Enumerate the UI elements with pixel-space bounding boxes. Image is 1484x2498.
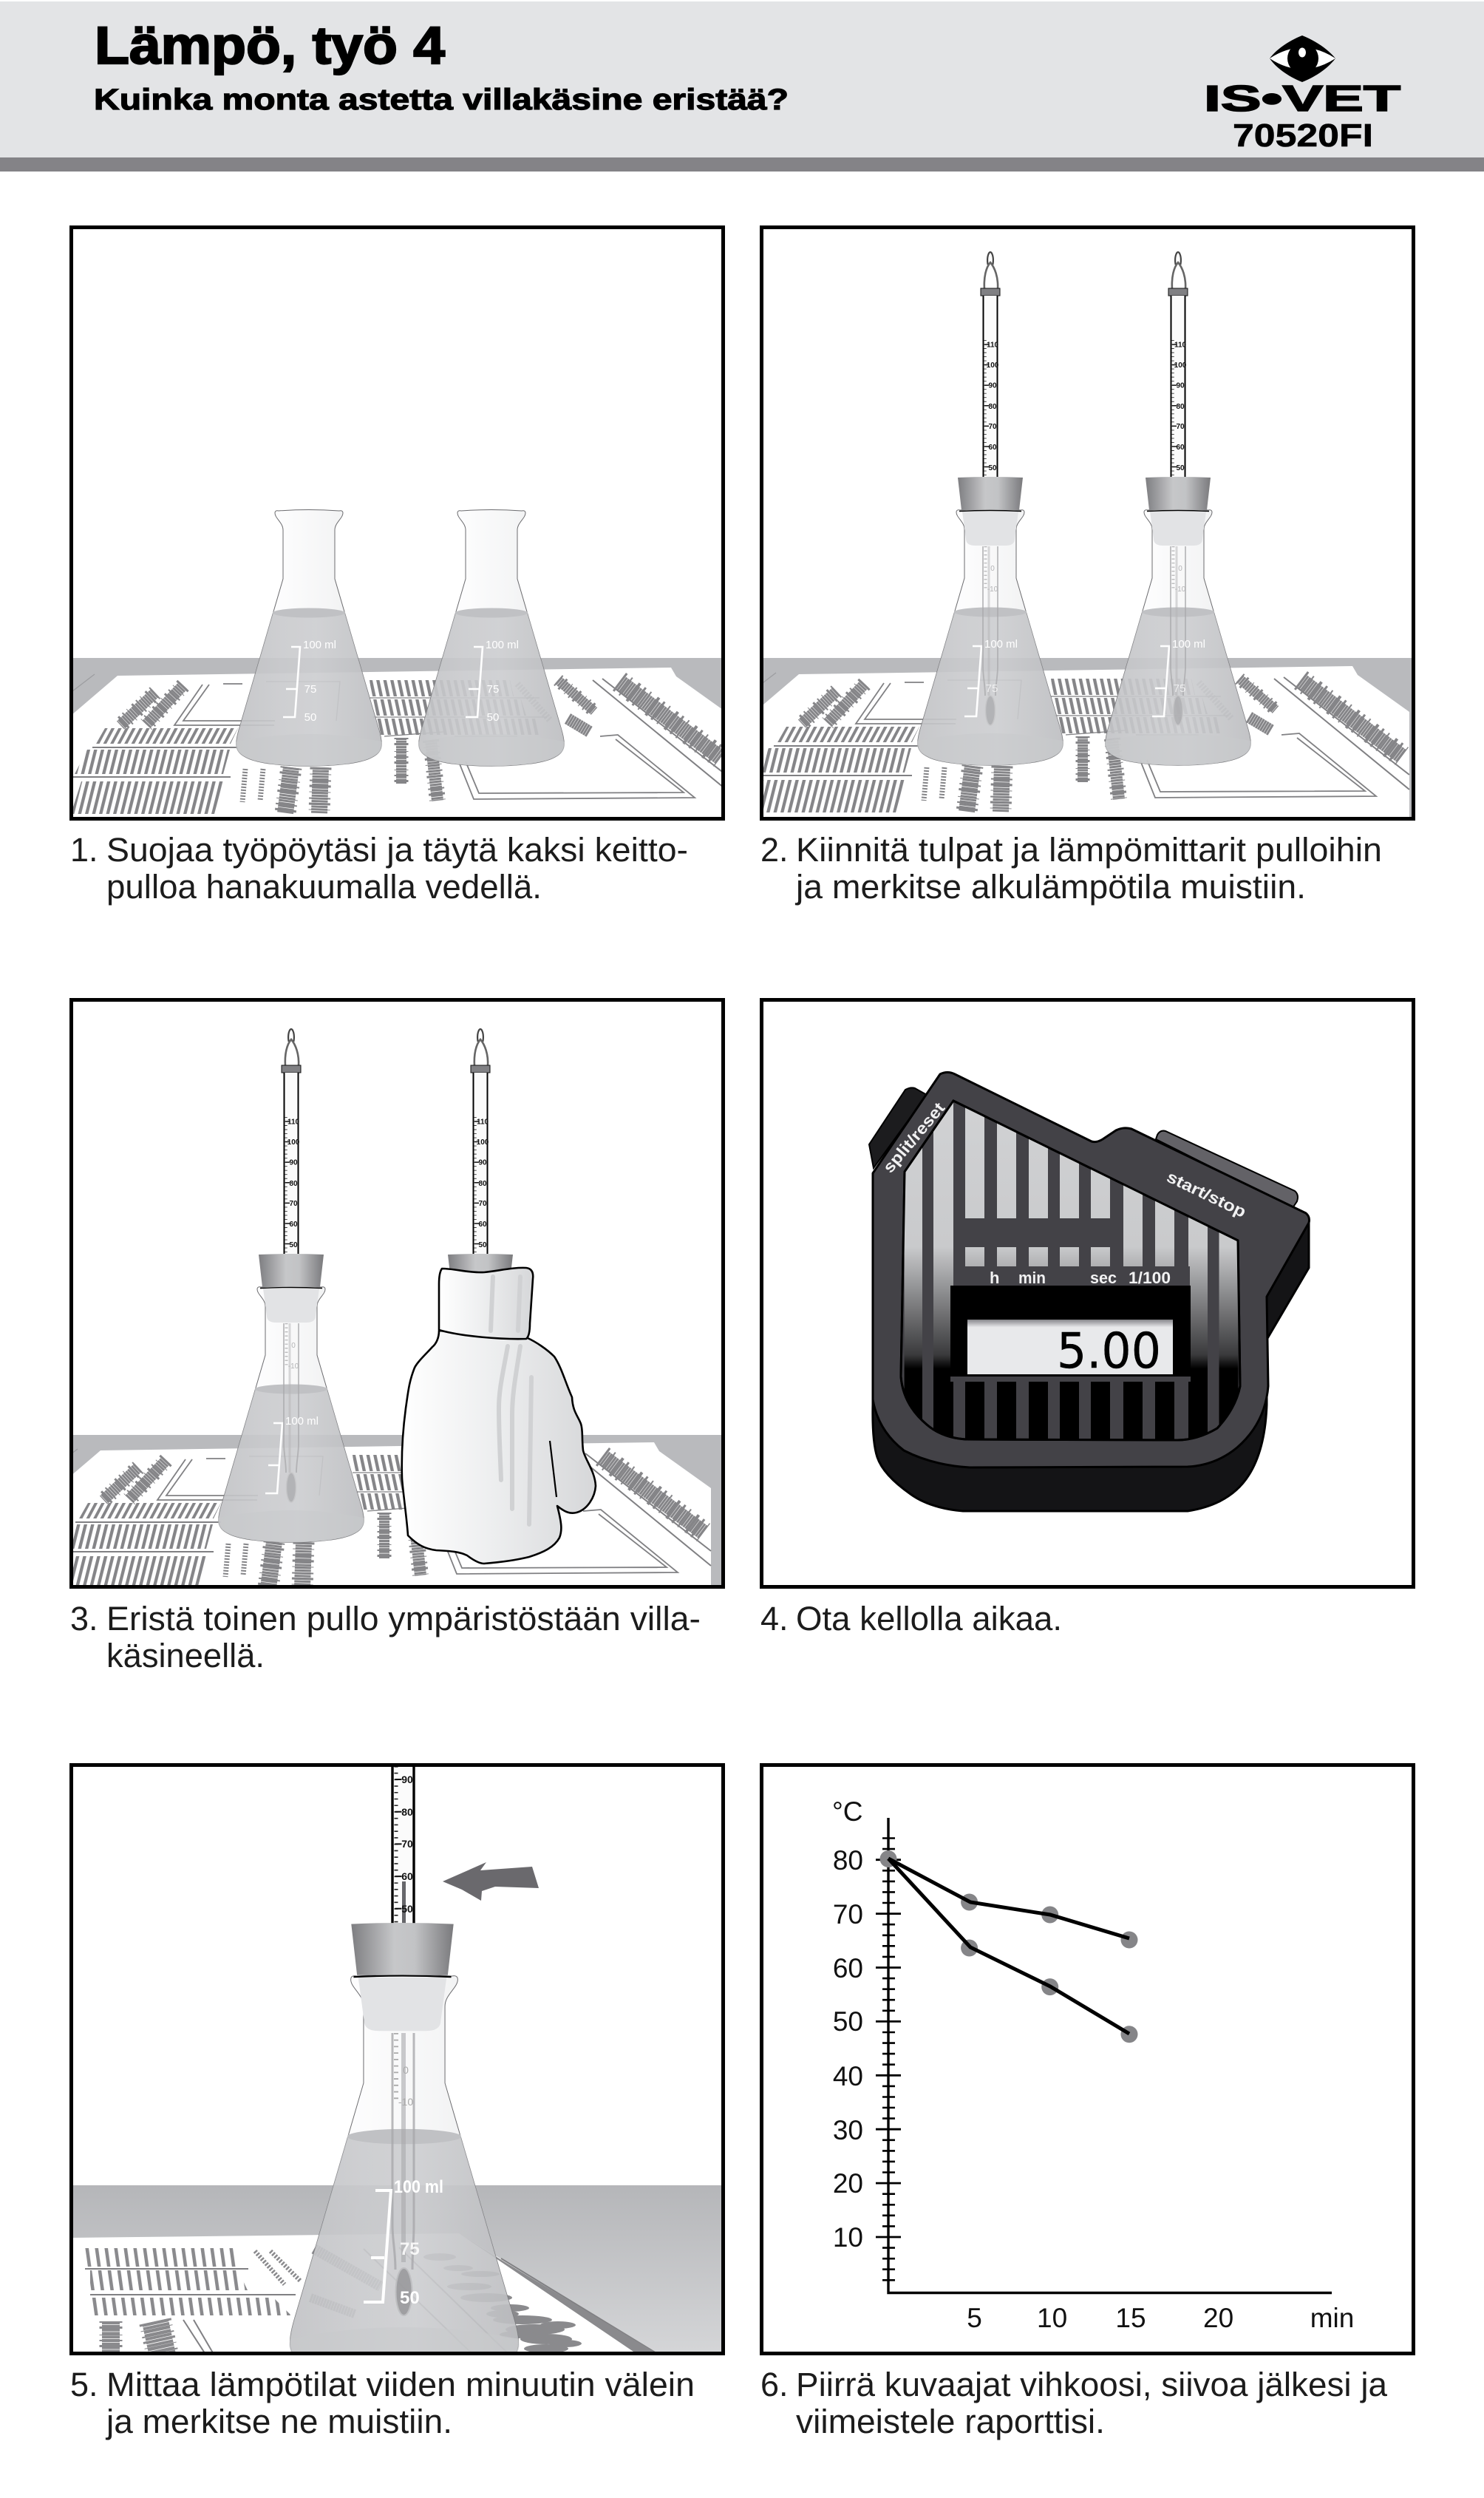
right flask with thermometer: 70 — [1176, 423, 1185, 431]
left flask with thermometer: 90 — [988, 381, 997, 390]
y axis tick labels: 40 — [833, 2061, 863, 2091]
y axis tick labels: 30 — [833, 2115, 863, 2145]
step 6 caption — [760, 2366, 1388, 2440]
step 3 caption: Eristä toinen pullo ympäristöstään villa- — [106, 1600, 701, 1637]
right flask: 75 — [487, 683, 499, 696]
left flask with thermometer: 70 — [988, 423, 997, 431]
y axis tick labels — [833, 1845, 863, 2253]
right flask: 50 — [487, 711, 499, 724]
panel 2: flasks with stoppers and thermometers — [748, 228, 1415, 823]
step 5 caption: Mittaa lämpötilat viiden minuutin välein — [106, 2366, 695, 2403]
icon: eye — [1270, 35, 1335, 82]
thermometer inside flask: -10 — [398, 2096, 413, 2108]
product code: 70520FI — [1233, 118, 1373, 154]
left flask: 75 — [304, 683, 316, 696]
open flask with thermometer: 60 — [289, 1221, 298, 1229]
step 5 caption: 5. — [70, 2366, 98, 2403]
y axis tick labels: 70 — [833, 1899, 863, 1929]
title: Lämpö, työ 4 — [95, 17, 446, 75]
step 1 caption: pulloa hanakuumalla vedellä. — [106, 868, 542, 906]
step 4 caption: Ota kellolla aikaa. — [796, 1600, 1062, 1637]
line chart — [832, 1796, 1354, 2333]
step 5 caption — [70, 2366, 695, 2440]
start/stop label: start/stop — [1164, 1167, 1249, 1221]
panel 5 frame — [71, 1765, 723, 2354]
panel 1: two flasks — [67, 228, 728, 824]
LCD display: 5.00 — [1057, 1323, 1161, 1379]
protective newspaper — [67, 668, 728, 824]
flask volume marks: 50 — [400, 2288, 420, 2308]
flask volume marks: 100 ml — [394, 2177, 443, 2197]
thermometer scale above stopper: 80 — [401, 1806, 413, 1818]
icon: split/reset button — [869, 1087, 927, 1168]
wool mitten — [402, 1268, 596, 1564]
measurement points — [879, 1850, 1138, 2043]
left flask with thermometer: 0 — [990, 565, 995, 573]
left flask with thermometer: 60 — [988, 444, 997, 452]
right flask with thermometer: 60 — [1176, 444, 1185, 452]
step 1 caption: 1. — [70, 831, 98, 869]
open flask with thermometer: 90 — [289, 1159, 298, 1167]
panel 4: stopwatch — [761, 999, 1413, 1586]
logo — [1204, 35, 1400, 154]
open flask with thermometer: 100 — [287, 1138, 300, 1147]
left flask with thermometer: 75 — [986, 682, 998, 695]
left flask with thermometer: 80 — [988, 403, 997, 411]
open flask with thermometer: 50 — [289, 1241, 298, 1249]
right flask with thermometer: 75 — [1174, 682, 1185, 695]
step 6 caption: viimeistele raporttisi. — [796, 2403, 1105, 2440]
y axis tick labels: 50 — [833, 2006, 863, 2037]
thermometer inside flask — [392, 2033, 414, 2315]
y axis unit: °C — [832, 1796, 863, 1827]
cooling curve: open flask — [888, 1859, 1129, 2034]
x axis labels: 20 — [1203, 2303, 1233, 2333]
left flask with thermometer — [917, 252, 1063, 765]
left flask with thermometer: 100 ml — [984, 638, 1018, 651]
step 6 caption: Piirrä kuvaajat vihkoosi, siivoa jälkesi ja — [796, 2366, 1388, 2403]
thermometer scale above stopper: 90 — [401, 1774, 413, 1785]
header rule — [0, 157, 1484, 172]
logo wordmark: IS•VET — [1204, 79, 1400, 119]
thermometer above mitten: 60 — [478, 1221, 487, 1229]
right flask with thermometer: 110 — [1174, 342, 1187, 349]
step 3 caption — [70, 1600, 701, 1674]
thermometer scale above stopper: 70 — [401, 1838, 413, 1850]
protective newspaper — [73, 1442, 711, 1585]
left flask with thermometer: 110 — [987, 342, 999, 349]
y axis tick labels: 20 — [833, 2168, 863, 2199]
thermometer above mitten: 110 — [477, 1118, 489, 1127]
open flask with thermometer: 0 — [291, 1342, 296, 1350]
open flask with thermometer: -10 — [288, 1362, 299, 1371]
panel 3: flask and wool mitten — [50, 999, 724, 1599]
left flask with thermometer: 50 — [988, 464, 997, 472]
step 2 caption: ja merkitse alkulämpötila muistiin. — [794, 868, 1306, 906]
thermometer above mitten: 50 — [478, 1241, 487, 1249]
thermometer above mitten: 80 — [478, 1180, 487, 1188]
step 1 caption — [70, 831, 688, 906]
thermometer scale above stopper: 60 — [401, 1870, 413, 1882]
right flask with thermometer: 100 ml — [1172, 638, 1205, 651]
x axis labels: 15 — [1115, 2303, 1146, 2333]
step 6 caption: 6. — [760, 2366, 789, 2403]
y axis tick labels: 80 — [833, 1845, 863, 1876]
stopwatch face — [901, 1094, 1240, 1442]
open flask with thermometer: 70 — [289, 1200, 298, 1208]
header band — [0, 1, 1484, 157]
right flask with thermometer — [1105, 252, 1251, 765]
panel 1 scene — [67, 510, 728, 824]
icon: start/stop button — [1156, 1131, 1298, 1208]
display housing — [950, 1286, 1191, 1377]
panel 2 scene — [748, 252, 1415, 823]
split/reset label: split/reset — [879, 1099, 949, 1176]
thermometer inside flask: 0 — [403, 2064, 409, 2076]
header — [0, 1, 1484, 172]
table top — [71, 1435, 724, 1590]
open flask with thermometer: 100 ml — [285, 1415, 319, 1428]
step 5 caption: ja merkitse ne muistiin. — [105, 2403, 452, 2440]
display unit labels: min — [1018, 1269, 1046, 1287]
right flask: 100 ml — [486, 639, 519, 651]
left flask with thermometer: -10 — [987, 586, 998, 594]
flask volume marks: 75 — [400, 2239, 420, 2259]
display unit labels: 1/100 — [1129, 1269, 1171, 1287]
table top — [761, 658, 1415, 821]
display unit labels: h — [990, 1269, 999, 1287]
step 1 caption: Suojaa työpöytäsi ja täytä kaksi keitto- — [106, 831, 688, 869]
stopwatch back shell — [873, 1223, 1309, 1511]
panel 1 frame — [71, 228, 723, 819]
left flask: 100 ml — [303, 639, 336, 651]
display unit labels — [990, 1269, 1171, 1287]
thermometer above mitten: 90 — [478, 1159, 487, 1167]
right flask with thermometer: 0 — [1178, 565, 1182, 573]
left flask: 50 — [304, 711, 316, 724]
table top — [71, 2185, 724, 2355]
x axis labels: min — [1310, 2303, 1354, 2333]
step 2 caption: Kiinnitä tulpat ja lämpömittarit pulloihin — [796, 831, 1382, 869]
stopper — [351, 1923, 454, 2031]
step 3 caption: 3. — [70, 1600, 98, 1637]
step 2 caption: 2. — [760, 831, 789, 869]
stopwatch — [869, 1072, 1310, 1511]
panel 4 frame — [761, 999, 1413, 1586]
y axis tick labels: 60 — [833, 1953, 863, 1983]
cooling curve: insulated flask — [888, 1859, 1129, 1938]
step 3 caption: käsineellä. — [106, 1637, 265, 1674]
thermometer above mitten: 70 — [478, 1200, 487, 1208]
panel 6: line chart — [761, 1765, 1413, 2354]
panel 3 frame — [71, 999, 723, 1586]
right flask — [418, 510, 565, 766]
x axis labels — [967, 2303, 1354, 2333]
right flask with thermometer: -10 — [1175, 586, 1186, 594]
panel 3 scene — [50, 1029, 724, 1599]
thermometer scale above stopper — [392, 1766, 414, 1924]
panel 5 scene — [71, 1766, 724, 2377]
left flask — [236, 510, 382, 766]
right flask with thermometer: 90 — [1176, 381, 1185, 390]
panel 5: reading the thermometer — [71, 1765, 724, 2377]
axes and ticks — [876, 1818, 1332, 2293]
y axis tick labels: 10 — [833, 2222, 863, 2253]
x axis labels: 10 — [1037, 2303, 1067, 2333]
step 2 caption — [760, 831, 1382, 906]
close-up flask — [290, 1975, 519, 2377]
thermometer above mitten: 100 — [477, 1138, 489, 1147]
open flask with thermometer — [218, 1029, 364, 1542]
arrow pointing to thermometer reading — [443, 1862, 539, 1901]
panel 2 frame — [761, 228, 1413, 819]
open flask with thermometer: 80 — [289, 1180, 298, 1188]
x axis labels: 5 — [967, 2303, 982, 2333]
flask volume marks — [364, 2177, 443, 2308]
open flask with thermometer: 110 — [287, 1118, 300, 1127]
thermometer above mitten — [448, 1028, 513, 1272]
right flask with thermometer: 100 — [1174, 362, 1187, 370]
subtitle: Kuinka monta astetta villakäsine eristää? — [94, 84, 789, 116]
thermometer scale above stopper: 50 — [401, 1903, 413, 1915]
stopwatch front body — [873, 1072, 1310, 1467]
step 4 caption: 4. — [760, 1600, 789, 1637]
right flask with thermometer: 80 — [1176, 403, 1185, 411]
panel 6 frame — [761, 1765, 1413, 2354]
display unit labels: sec — [1090, 1269, 1117, 1287]
left flask with thermometer: 100 — [987, 362, 999, 370]
protective newspaper — [748, 666, 1409, 823]
table top — [73, 658, 721, 714]
right flask with thermometer: 50 — [1176, 464, 1185, 472]
LCD display — [967, 1320, 1173, 1379]
protective newspaper — [72, 2233, 659, 2355]
